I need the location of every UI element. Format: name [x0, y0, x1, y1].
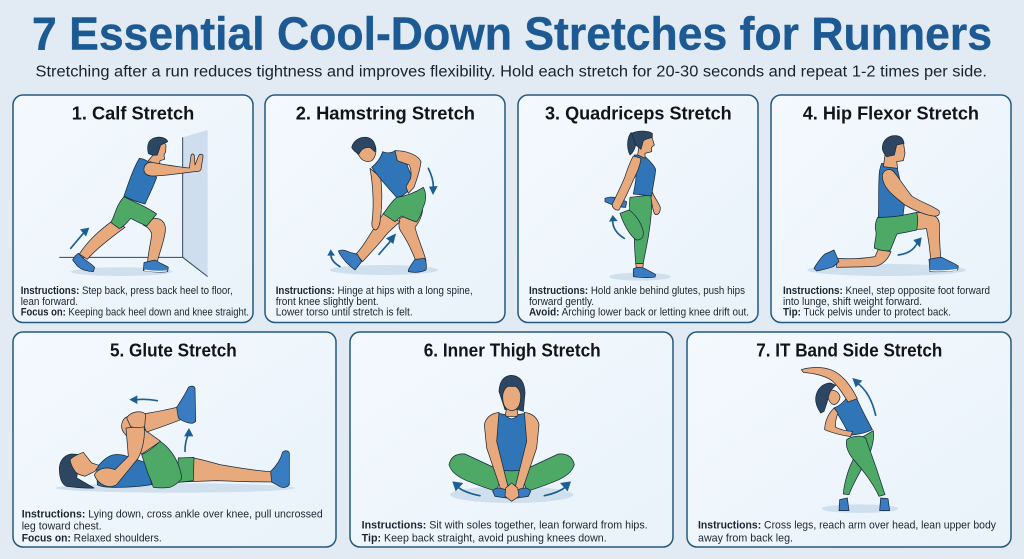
instructions: hip flexor stretch	[783, 285, 990, 318]
instructions: hip flexor stretch: Instructions: Kneel, step opposite foot forward	[783, 285, 990, 297]
instructions: quadriceps stretch: Avoid: Arching lower back or letting knee drift out.	[529, 306, 749, 318]
heading: IT band side stretch: 7. IT Band Side Stretch	[756, 339, 942, 360]
panel: inner thigh stretch	[350, 332, 673, 547]
panel: calf stretch	[13, 95, 253, 322]
illustration: kneeling hip flexor stretch	[807, 136, 966, 276]
instructions: hip flexor stretch: into lunge, shift weight forward.	[783, 296, 922, 308]
illustration: seated butterfly stretch	[449, 375, 574, 503]
instructions: IT band side stretch	[698, 520, 997, 544]
illustration: lying glute stretch	[55, 386, 295, 493]
instructions: hamstring stretch: front knee slightly bent.	[276, 296, 379, 308]
subtitle: Stretching after a run reduces tightness and improves flexibility. Hold each stretch for 20-30 seconds and repeat 1-2 times per side.	[36, 64, 987, 81]
heading: hamstring stretch: 2. Hamstring Stretch	[296, 102, 475, 123]
illustration: standing quadriceps stretch	[605, 131, 671, 281]
panel: IT band side stretch	[687, 332, 1011, 547]
instructions: hamstring stretch: Lower torso until stretch is felt.	[276, 306, 413, 318]
illustration: standing side bend	[801, 368, 898, 513]
instructions: hamstring stretch	[276, 285, 473, 318]
panel: hip flexor stretch	[771, 95, 1011, 322]
heading: quadriceps stretch: 3. Quadriceps Stretch	[545, 102, 732, 123]
instructions: hamstring stretch: Instructions: Hinge at hips with a long spine,	[276, 285, 473, 297]
panel: quadriceps stretch	[518, 95, 758, 322]
instructions: calf stretch: Instructions: Step back, press back heel to floor,	[21, 285, 233, 297]
heading: calf stretch: 1. Calf Stretch	[72, 102, 194, 123]
instructions: hip flexor stretch: Tip: Tuck pelvis under to protect back.	[783, 306, 951, 318]
instructions: glute stretch: Focus on: Relaxed shoulders.	[22, 532, 162, 544]
instructions: calf stretch: lean forward.	[21, 296, 78, 308]
instructions: quadriceps stretch	[529, 285, 749, 318]
instructions: glute stretch: Instructions: Lying down, cross ankle over knee, pull uncrossed	[22, 508, 323, 520]
instructions: inner thigh stretch: Tip: Keep back straight, avoid pushing knees down.	[362, 532, 607, 544]
heading: hip flexor stretch: 4. Hip Flexor Stretch	[803, 102, 979, 123]
heading: glute stretch: 5. Glute Stretch	[110, 339, 237, 360]
instructions: quadriceps stretch: forward gently.	[529, 296, 594, 308]
instructions: IT band side stretch: Instructions: Cross legs, reach arm over head, lean upper body	[698, 520, 997, 532]
instructions: calf stretch: Focus on: Keeping back heel down and knee straight.	[21, 306, 249, 318]
instructions: IT band side stretch: away from back leg.	[698, 532, 793, 544]
illustration: calf stretch against wall	[59, 130, 208, 277]
instructions: calf stretch	[21, 285, 249, 318]
panel: glute stretch	[13, 332, 336, 547]
instructions: glute stretch: leg toward chest.	[22, 521, 102, 533]
illustration: hamstring stretch	[327, 137, 438, 275]
instructions: glute stretch	[22, 508, 323, 544]
panel: hamstring stretch	[265, 95, 505, 322]
instructions: inner thigh stretch	[362, 520, 648, 544]
instructions: quadriceps stretch: Instructions: Hold ankle behind glutes, push hips	[529, 285, 745, 297]
title: 7 Essential Cool-Down Stretches for Runners	[32, 8, 992, 60]
heading: inner thigh stretch: 6. Inner Thigh Stretch	[424, 339, 601, 360]
instructions: inner thigh stretch: Instructions: Sit with soles together, lean forward from hips.	[362, 520, 648, 532]
